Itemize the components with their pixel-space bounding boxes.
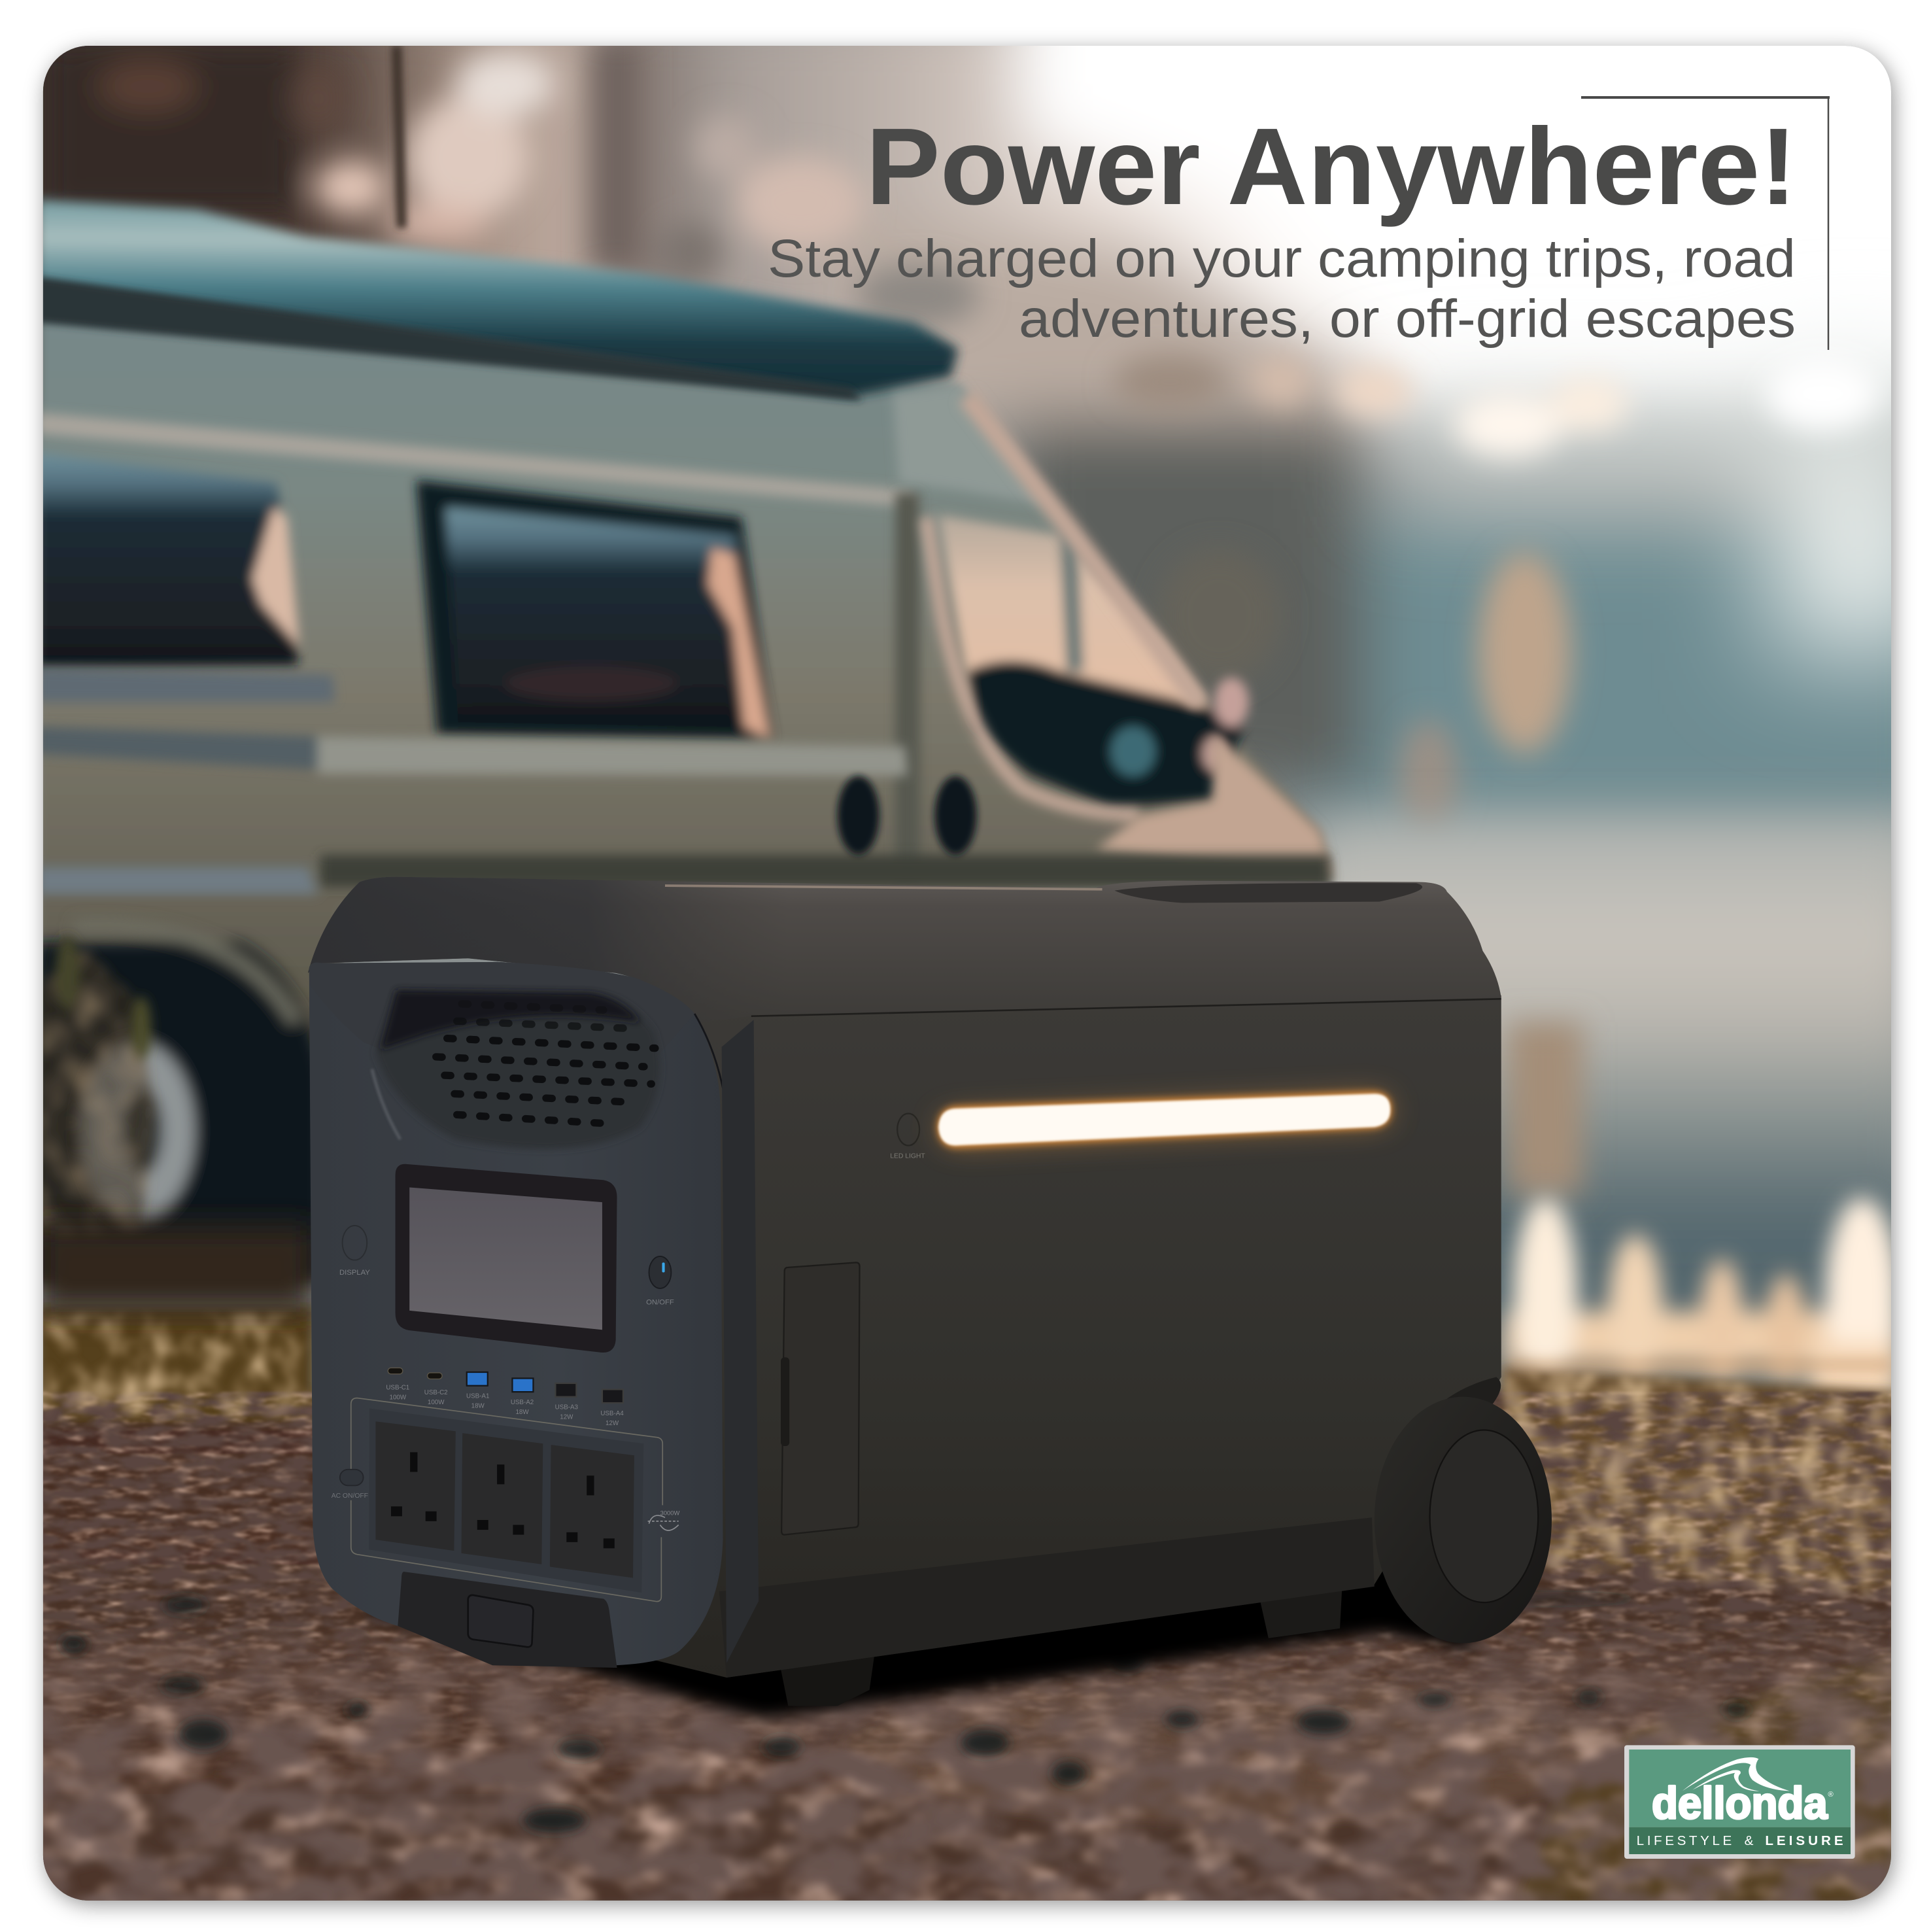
background: right edge haze <box>1392 370 1931 653</box>
logo strapline: & <box>1745 1833 1754 1848</box>
USB port labels: USB-C1 <box>386 1384 409 1391</box>
side door panel <box>781 1262 860 1535</box>
vent shadow <box>381 990 640 1050</box>
camper van <box>37 199 1333 1312</box>
socket one <box>375 1421 456 1551</box>
contact shadow under power station <box>369 1527 1478 1718</box>
power button: ON/OFF <box>646 1298 674 1306</box>
socket two <box>461 1433 543 1564</box>
roadside bush <box>37 936 154 1244</box>
wheel fender <box>1404 1377 1501 1447</box>
power button <box>646 1256 674 1306</box>
3000W icon: 3000W <box>660 1509 680 1516</box>
van door pillar <box>895 492 920 881</box>
van belt trim <box>37 413 917 508</box>
van side window one <box>37 453 299 668</box>
ground: dark stones <box>60 1595 1750 1833</box>
display button <box>339 1226 370 1277</box>
subtitle line one: Stay charged on your camping trips, road <box>768 229 1796 288</box>
vent holes <box>436 1004 655 1124</box>
van door handles <box>838 776 976 855</box>
van cab roof highlight <box>893 385 1047 505</box>
corner dark strip <box>722 1020 759 1663</box>
subtitle line two: adventures, or off-grid escapes <box>1019 289 1796 349</box>
background: thin pine trunk <box>396 46 402 228</box>
van cab window <box>938 515 1249 807</box>
title block <box>768 97 1830 350</box>
AC button: AC ON/OFF <box>332 1492 368 1500</box>
LED button and label: LED LIGHT <box>890 1152 925 1160</box>
van side window two <box>417 480 774 739</box>
door latch <box>781 1357 789 1446</box>
outlet recess <box>369 1409 643 1593</box>
ground: pine-needle forest floor <box>37 1305 1896 1909</box>
AC button <box>332 1470 368 1500</box>
van roof rail <box>37 277 862 400</box>
carry flap <box>398 1572 617 1668</box>
corner rule top <box>1581 96 1830 99</box>
wheel hub <box>1430 1430 1538 1602</box>
heading: Power Anywhere! <box>866 106 1797 228</box>
rear foot <box>1256 1583 1342 1638</box>
logo wordmark: dellonda <box>1652 1778 1828 1828</box>
LED light bar <box>938 1094 1390 1145</box>
background: bokeh highlights <box>44 37 1879 833</box>
USB port labels: 12W <box>606 1420 619 1427</box>
display bezel <box>396 1164 617 1353</box>
van hood <box>1096 733 1333 877</box>
lid <box>308 877 1501 1022</box>
flap button <box>468 1595 533 1647</box>
3000W icon <box>648 1509 680 1530</box>
USB port labels: 100W <box>428 1399 445 1406</box>
lid cup recess <box>1114 883 1422 903</box>
USB port labels: 100W <box>390 1394 407 1401</box>
lid seam <box>751 999 1501 1016</box>
display button: DISPLAY <box>339 1269 370 1277</box>
registered mark: ® <box>1828 1791 1834 1799</box>
LED wide ambient glow <box>940 1095 1390 1145</box>
USB port labels: USB-C2 <box>424 1389 448 1396</box>
lake with misty water <box>1305 828 1921 1392</box>
van body <box>37 296 1333 1281</box>
power station <box>308 877 1552 1706</box>
lid warm rim <box>665 886 1102 889</box>
feet <box>777 1638 877 1706</box>
LED light bar glow <box>937 1092 1392 1148</box>
background: misty forest and sky <box>43 46 1891 833</box>
USB port labels: USB-A4 <box>600 1410 624 1417</box>
logo strapline: LEISURE <box>1765 1833 1843 1848</box>
lake: warm reflections on water <box>1509 1022 1582 1195</box>
USB port labels: USB-A3 <box>555 1404 579 1411</box>
wheel tyre <box>1375 1397 1552 1643</box>
front panel <box>309 962 723 1665</box>
logo strapline: LIFESTYLE <box>1637 1833 1732 1848</box>
LED button and label <box>890 1114 925 1160</box>
outlet outline <box>351 1398 662 1602</box>
side body <box>640 995 1501 1678</box>
dark scrub behind ground <box>37 1226 314 1312</box>
van wheel and arch <box>37 925 322 1281</box>
logo wave mark <box>1683 1757 1790 1791</box>
corner rule side <box>1828 97 1829 350</box>
van side strips <box>37 668 1330 894</box>
van pop-top roof <box>37 199 958 396</box>
dellonda logo <box>1624 1745 1855 1859</box>
vent recess <box>375 990 660 1149</box>
display screen <box>409 1188 602 1330</box>
handle band <box>309 962 694 1054</box>
USB port labels: USB-A2 <box>511 1399 534 1406</box>
USB port labels: USB-A1 <box>466 1393 489 1400</box>
USB port labels: 18W <box>471 1403 485 1410</box>
lid dark left shading <box>308 877 1108 1022</box>
USB port labels <box>386 1384 624 1427</box>
van A-pillar and window frame <box>926 396 1201 816</box>
USB ports <box>388 1368 623 1403</box>
USB port labels: 12W <box>560 1414 573 1421</box>
lower skirt <box>719 1517 1375 1678</box>
corner vertical edge <box>694 1014 732 1601</box>
USB port labels: 18W <box>515 1409 529 1416</box>
vent crease highlight <box>372 1069 400 1139</box>
socket three <box>550 1445 634 1578</box>
